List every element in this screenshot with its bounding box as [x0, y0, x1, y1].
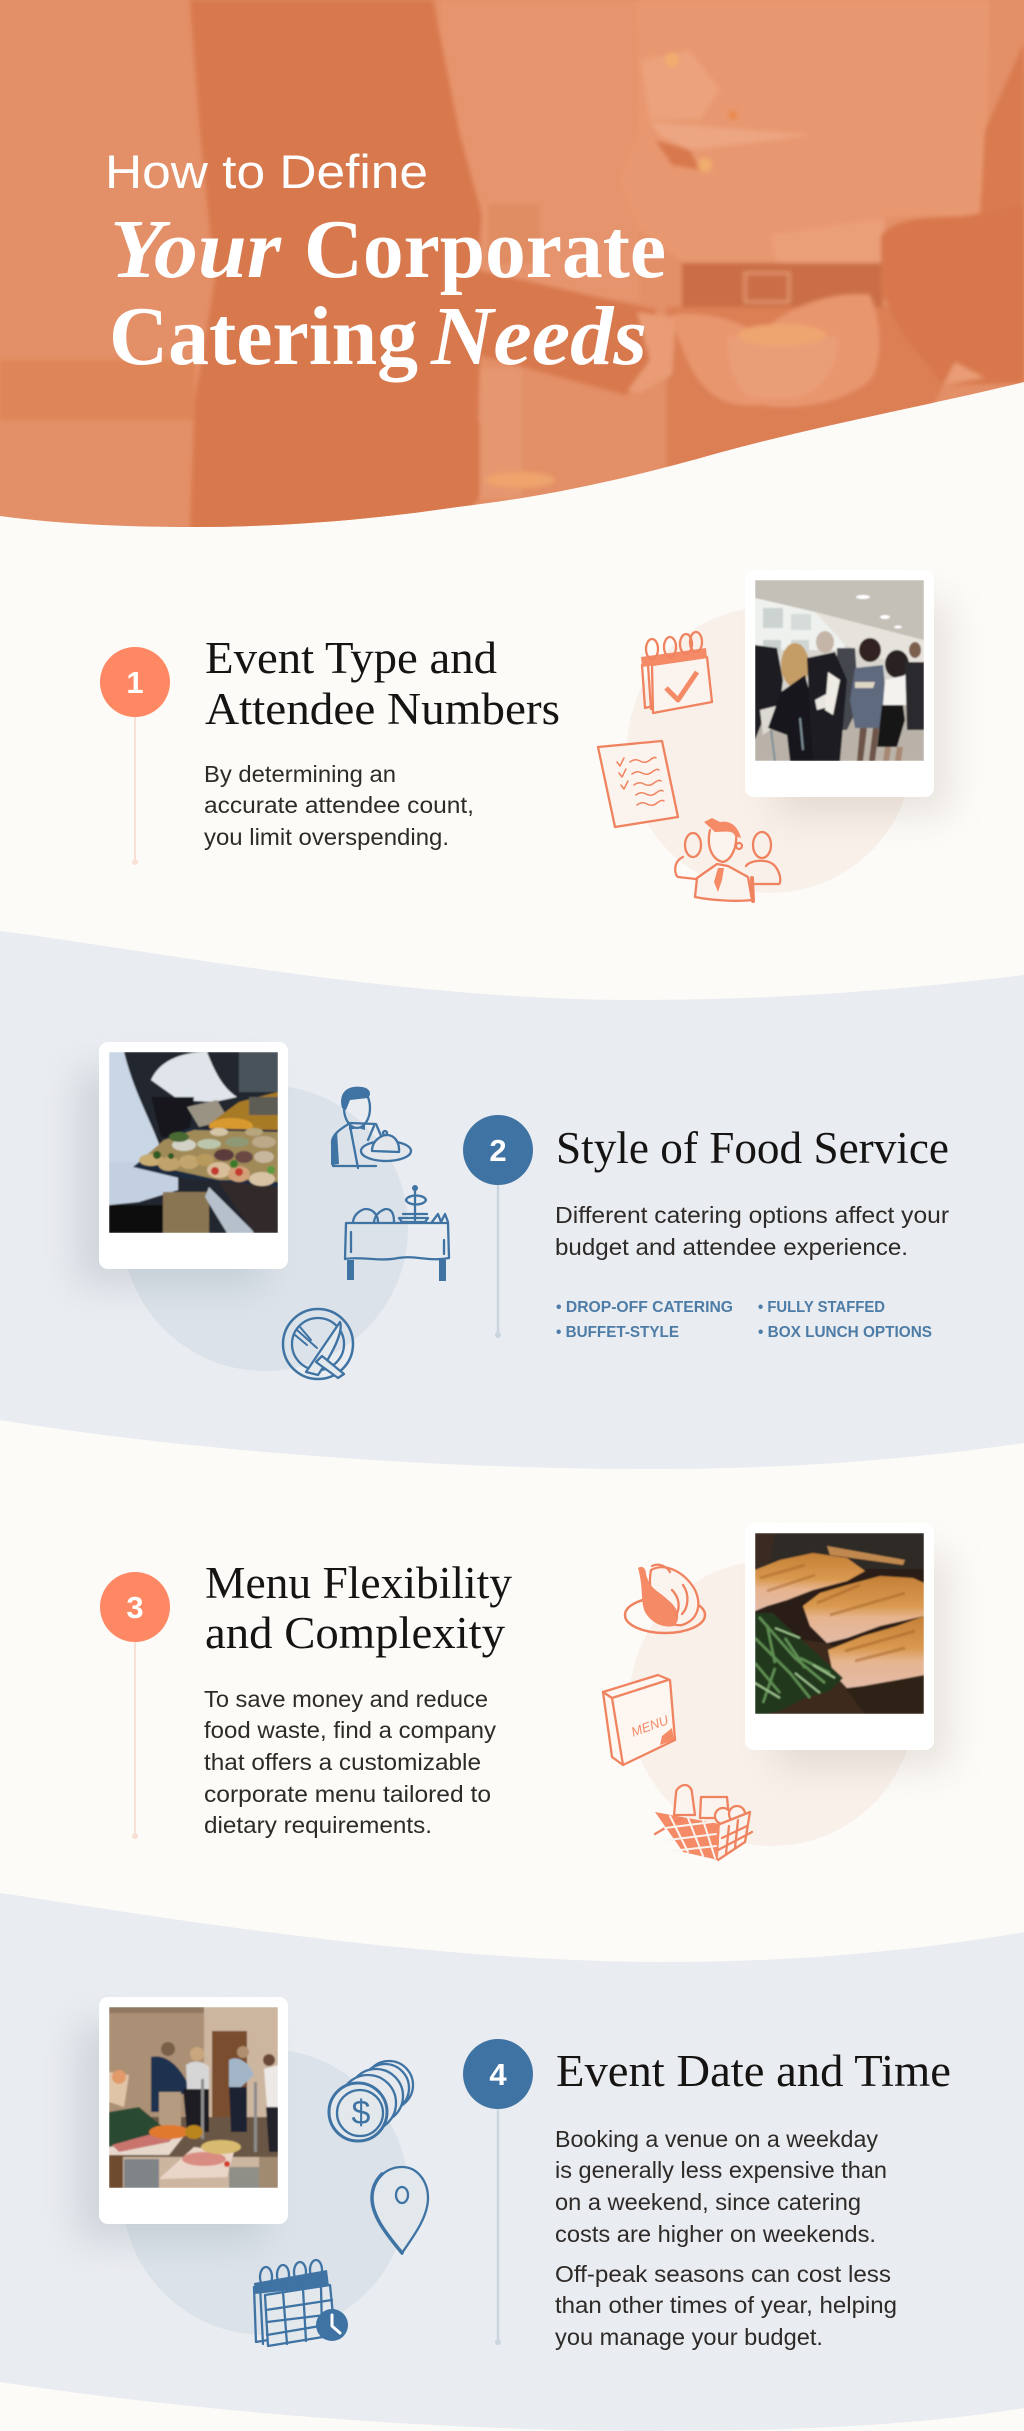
icon: calendar check: [641, 632, 712, 713]
icon: grocery basket: [655, 1785, 752, 1860]
body text: Booking a venue on a weekday: [555, 2126, 878, 2152]
background circle: [122, 2049, 408, 2335]
number badge 4: [463, 2039, 533, 2109]
icon: plate with fork and knife: [283, 1309, 353, 1379]
icon: location pin: [372, 2167, 428, 2253]
panel: section 1 event type: [100, 570, 950, 901]
body text: budget and attendee experience.: [555, 1234, 908, 1260]
number badge 4: 4: [489, 2057, 507, 2092]
body text: is generally less expensive than: [555, 2157, 887, 2183]
number badge 1: 1: [126, 665, 144, 700]
photo card: salmon fillets: [745, 1523, 950, 1768]
body text: on a weekend, since catering: [555, 2189, 861, 2215]
panel: section 3 menu flexibility: [100, 1523, 950, 1860]
wave band background: [0, 931, 1024, 1469]
icon: roast chicken: [625, 1565, 705, 1633]
icon: calendar with clock: [254, 2260, 348, 2346]
heading: Event Date and Time: [556, 2046, 951, 2096]
title: Your: [110, 203, 282, 296]
title: Needs: [430, 290, 647, 383]
service style list: • FULLY STAFFED: [758, 1299, 885, 1316]
heading: Menu Flexibility: [205, 1558, 513, 1608]
body text: you limit overspending.: [204, 824, 449, 850]
body text: Off-peak seasons can cost less: [555, 2261, 891, 2287]
body text: [204, 1686, 497, 1838]
service style list: [556, 1299, 932, 1341]
body text: than other times of year, helping: [555, 2292, 897, 2318]
icon: dollar coins: $: [352, 2094, 371, 2132]
heading: and Complexity: [205, 1608, 506, 1658]
icon: attendees: [675, 818, 780, 901]
hero duotone photo background: [0, 0, 1024, 540]
background circle: [629, 1560, 915, 1846]
icon: waiter with cloche: [331, 1087, 411, 1168]
body text: you manage your budget.: [555, 2324, 823, 2350]
title: [105, 145, 666, 383]
body text: that offers a customizable: [204, 1749, 481, 1775]
wave band background: [0, 1893, 1024, 2431]
heading: Event Type and: [205, 633, 497, 683]
timeline line: [132, 1642, 138, 1839]
panel: section 2 style of food service: [0, 931, 1024, 1469]
background circle: [122, 1085, 408, 1371]
service style list: • DROP-OFF CATERING: [556, 1299, 733, 1316]
background circle: [627, 607, 913, 893]
number badge 3: 3: [126, 1590, 144, 1625]
icon: menu book: MENU: [629, 1712, 671, 1740]
body text: accurate attendee count,: [204, 792, 474, 818]
title: How to Define: [105, 145, 428, 198]
photo card: buffet reception: [78, 1997, 288, 2240]
icon: dollar coins: [329, 2061, 413, 2141]
body text: To save money and reduce: [204, 1686, 488, 1712]
panel: section 4 event date and time: [0, 1893, 1024, 2431]
body text: [555, 2126, 897, 2350]
body text: [555, 1202, 949, 1260]
timeline line: [495, 1185, 501, 1338]
timeline line: [495, 2109, 501, 2345]
icon: checklist: [598, 741, 678, 827]
service style list: • BOX LUNCH OPTIONS: [758, 1324, 932, 1341]
body text: Different catering options affect your: [555, 1202, 949, 1228]
icon: buffet table: [345, 1185, 449, 1281]
title: Corporate: [304, 203, 666, 296]
panel: hero: [0, 0, 1024, 540]
photo card: canapes tray: [78, 1042, 288, 1285]
body text: By determining an: [204, 761, 396, 787]
body text: food waste, find a company: [204, 1717, 497, 1743]
body text: [204, 761, 474, 850]
title: Catering: [109, 290, 418, 383]
number badge 1: [100, 647, 170, 717]
number badge 2: [463, 1115, 533, 1185]
heading: Style of Food Service: [556, 1123, 949, 1173]
body text: corporate menu tailored to: [204, 1781, 491, 1807]
heading: Attendee Numbers: [205, 684, 560, 734]
body text: costs are higher on weekends.: [555, 2221, 876, 2247]
timeline line: [132, 717, 138, 865]
heading: [205, 633, 560, 734]
body text: dietary requirements.: [204, 1812, 432, 1838]
photo card: networking event: [745, 570, 950, 815]
icon: menu book: [603, 1675, 675, 1765]
service style list: • BUFFET-STYLE: [556, 1324, 679, 1341]
number badge 3: [100, 1572, 170, 1642]
heading: [205, 1558, 513, 1658]
number badge 2: 2: [489, 1133, 507, 1168]
